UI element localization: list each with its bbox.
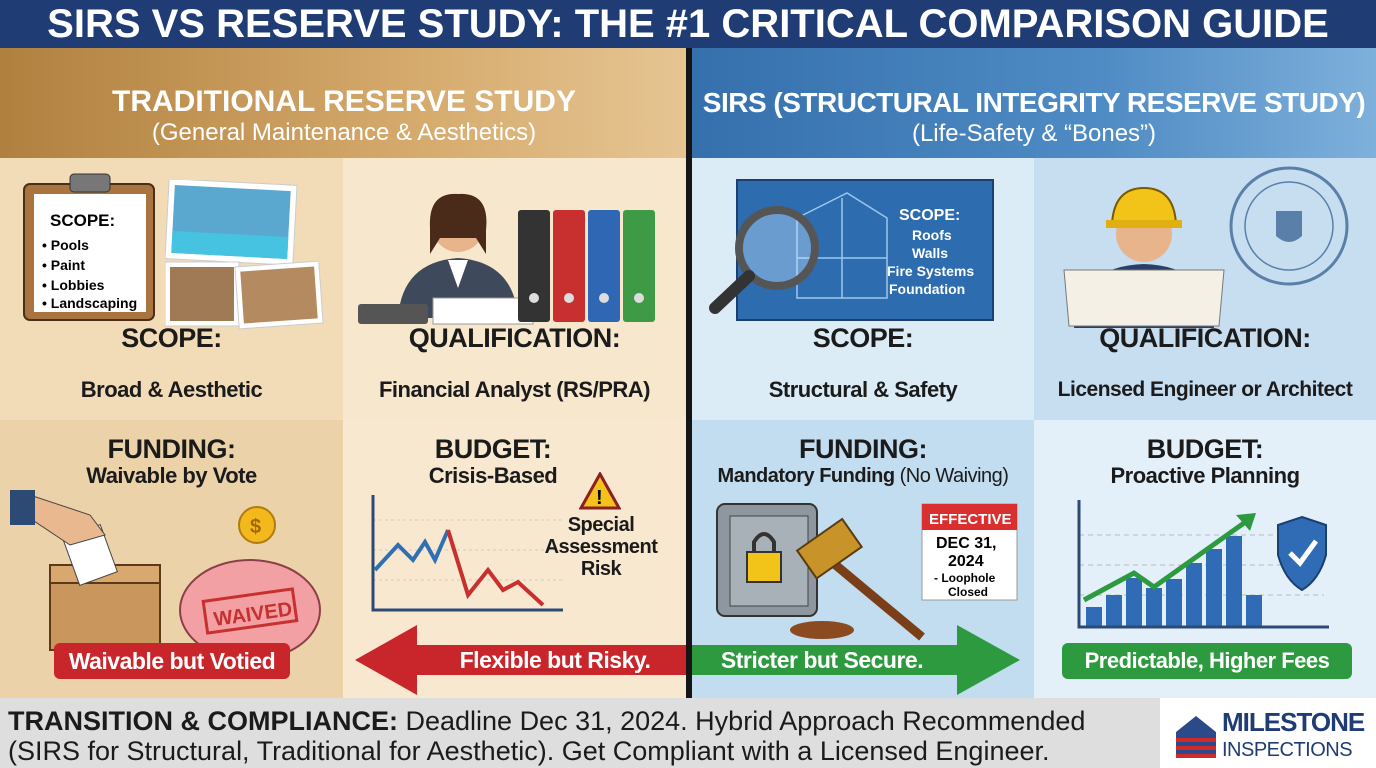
logo: milestone inspections: MILESTONE [1222, 707, 1364, 737]
header: SIRS: SIRS (STRUCTURAL INTEGRITY RESERVE STUDY) [703, 87, 1365, 118]
panel: SIRS budget: BUDGET: [1147, 434, 1263, 464]
chart: growth bars [1078, 500, 1329, 628]
panel: traditional budget: Crisis-Based [429, 463, 557, 488]
banner: predictable [1062, 643, 1352, 679]
banner: waivable [54, 643, 290, 679]
panel: traditional budget: Special Assessment Risk [545, 514, 657, 580]
panel: traditional funding [0, 420, 343, 698]
icon: clipboard: • Landscaping [42, 295, 137, 311]
panel: SIRS qualification: QUALIFICATION: [1099, 323, 1311, 353]
icon: photos [165, 180, 324, 330]
icon: safe, gavel, calendar: Closed [948, 585, 988, 599]
divider [686, 48, 692, 698]
panel: SIRS scope: SCOPE: [813, 323, 913, 353]
panel: traditional scope: SCOPE: [121, 323, 222, 353]
icon: warning: ! [596, 487, 603, 509]
icon: safe, gavel, calendar: 2024 [948, 553, 984, 570]
icon: blueprint with magnifier: Roofs [912, 227, 952, 243]
panel: SIRS budget: Proactive Planning [1110, 463, 1300, 488]
icon: blueprint with magnifier: Walls [912, 245, 948, 261]
panel: traditional qualification: Financial Analyst (RS/PRA) [379, 377, 650, 402]
header: SIRS [692, 48, 1376, 158]
panel: traditional budget: BUDGET: [435, 434, 551, 464]
header: traditional reserve study: TRADITIONAL RESERVE STUDY [112, 85, 576, 118]
icon: clipboard [23, 174, 155, 321]
arrow: flexible but risky: Flexible but Risky. [460, 647, 650, 673]
footer: transition & compliance [0, 698, 1160, 768]
panel: SIRS qualification: Licensed Engineer or Architect [1058, 378, 1352, 401]
footer: transition & compliance: TRANSITION & COMPLIANCE: Deadline Dec 31, 2024. Hybrid Approach Recommended [8, 706, 1085, 736]
icon: clipboard: • Pools [42, 237, 89, 253]
icon: safe, gavel, calendar: DEC 31, [936, 535, 996, 552]
arrow: stricter but secure [692, 625, 1020, 695]
icon: clipboard: • Lobbies [42, 277, 105, 293]
icon: warning [579, 472, 621, 510]
panel: traditional qualification: QUALIFICATION: [409, 323, 620, 353]
panel: SIRS funding [692, 420, 1034, 698]
icon: blueprint with magnifier: Foundation [889, 281, 965, 297]
header: traditional reserve study [0, 48, 688, 158]
banner: predictable: Predictable, Higher Fees [1085, 648, 1329, 673]
logo: milestone inspections: INSPECTIONS [1222, 739, 1352, 761]
panel: SIRS funding: Mandatory Funding (No Waiving) [718, 465, 1008, 487]
icon: ballot box and piggy bank: $ [250, 516, 261, 538]
panel: SIRS budget [1034, 420, 1376, 698]
icon: engineer with seal [1064, 166, 1348, 328]
panel: traditional funding: Waivable by Vote [86, 463, 257, 488]
icon: blueprint with magnifier [709, 179, 994, 321]
panel: SIRS scope: Structural & Safety [769, 377, 957, 402]
icon: ballot box and piggy bank: WAIVED [212, 598, 294, 631]
panel: traditional funding: FUNDING: [108, 434, 235, 464]
icon: safe, gavel, calendar: - Loophole [934, 571, 996, 585]
icon: blueprint with magnifier: Fire Systems [887, 263, 974, 279]
icon: ballot box and piggy bank [10, 490, 321, 652]
icon: blueprint with magnifier: SCOPE: [899, 207, 960, 224]
arrow: flexible but risky [355, 625, 686, 695]
icon: safe, gavel, calendar [716, 503, 1018, 640]
icon: analyst with binders [358, 194, 655, 324]
panel: traditional qualification [343, 158, 686, 420]
panel: SIRS qualification [1034, 158, 1376, 420]
panel: traditional scope [0, 158, 343, 420]
icon: safe, gavel, calendar: EFFECTIVE [929, 511, 1012, 528]
icon: clipboard: • Paint [42, 257, 85, 273]
banner: waivable: Waivable but Votied [69, 648, 275, 674]
panel: SIRS scope [692, 158, 1034, 420]
panel: traditional scope: Broad & Aesthetic [81, 377, 262, 402]
header: traditional reserve study: (General Maintenance & Aesthetics) [152, 119, 536, 146]
chart: crisis line [372, 495, 563, 612]
title bar: SIRS VS RESERVE STUDY: THE #1 CRITICAL COMPARISON GUIDE [47, 2, 1329, 46]
panel: SIRS funding: FUNDING: [799, 434, 927, 464]
arrow: stricter but secure: Stricter but Secure. [721, 647, 923, 673]
footer: transition & compliance: (SIRS for Structural, Traditional for Aesthetic). Get Compliant with a Licensed Engineer. [8, 736, 1050, 766]
header: SIRS: (Life-Safety & “Bones”) [912, 120, 1156, 147]
panel: traditional budget [343, 420, 686, 698]
logo: milestone inspections [1160, 698, 1376, 768]
icon: clipboard: SCOPE: [50, 211, 115, 230]
